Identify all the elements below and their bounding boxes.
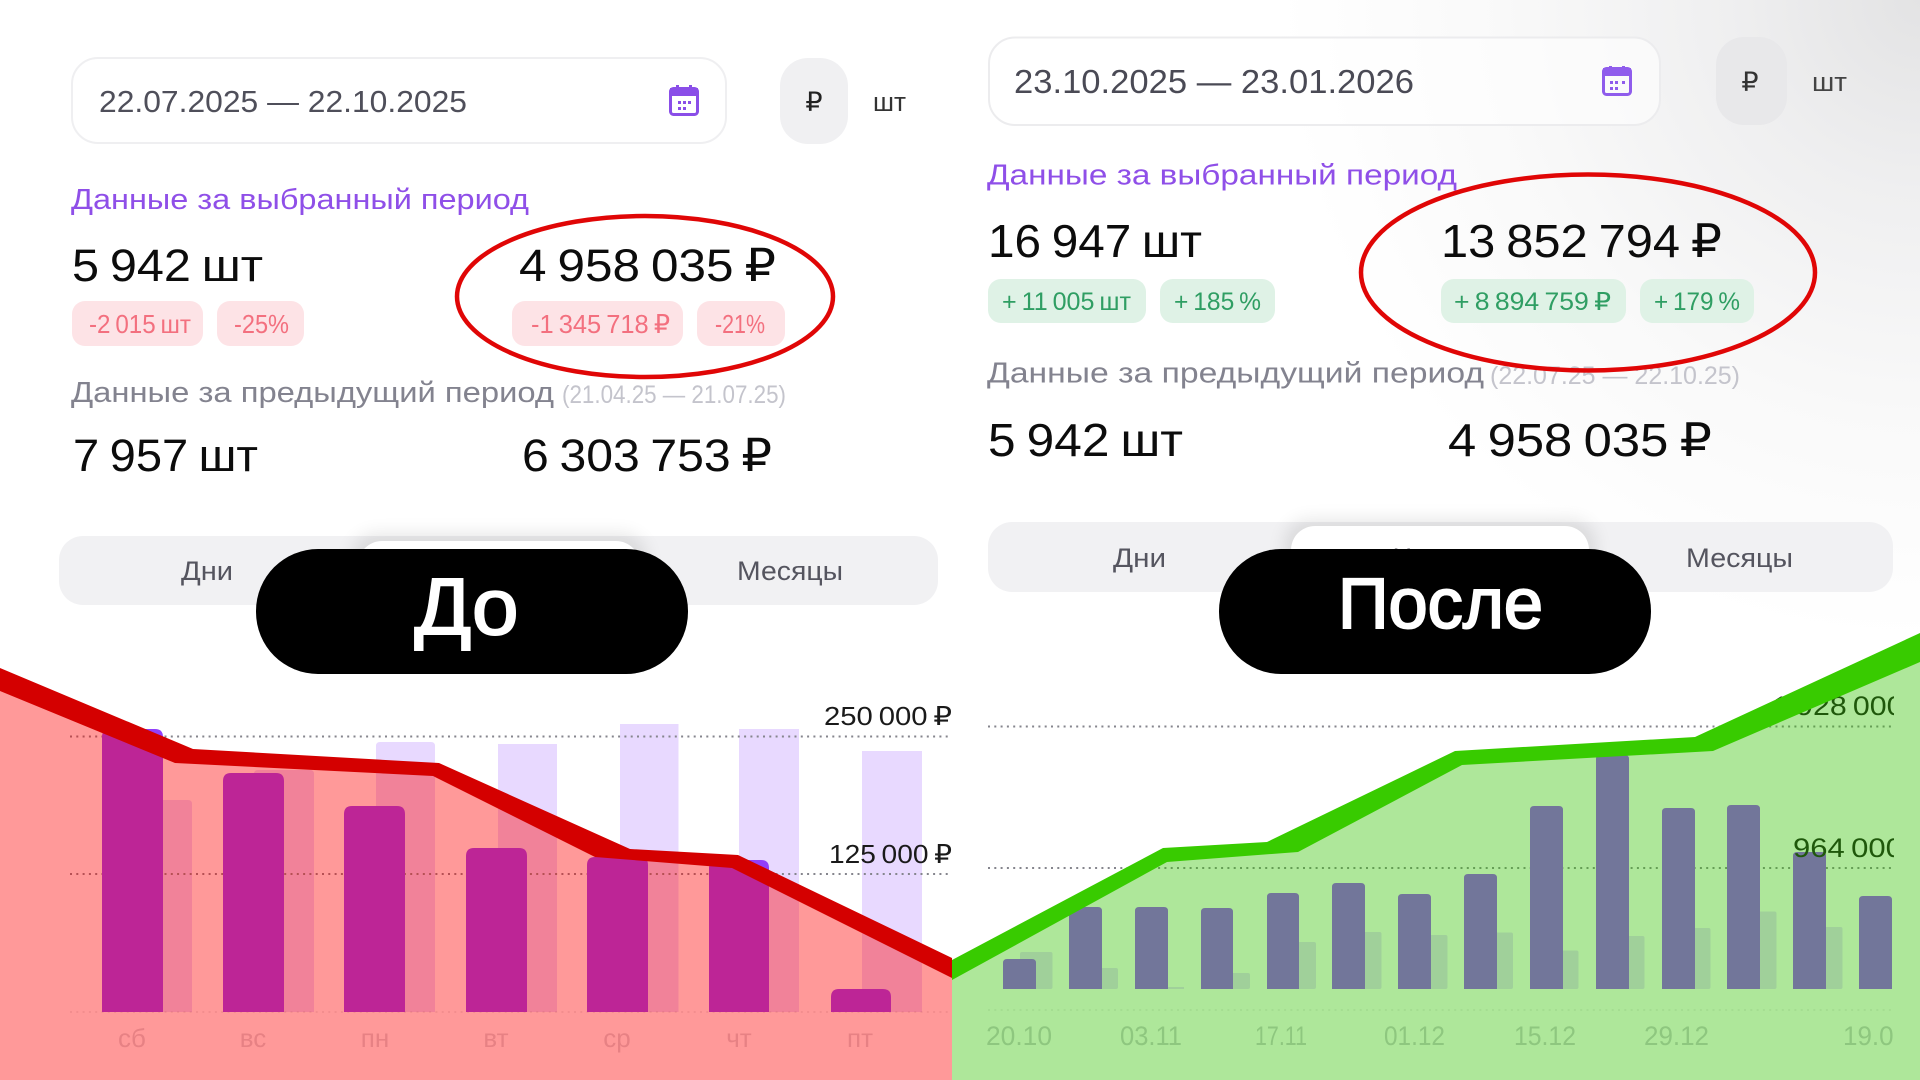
arrow line: growth [952, 633, 1920, 980]
bar chart: before: пн [361, 1023, 389, 1053]
bar chart: before: ср [603, 1023, 631, 1053]
badge: units change: -2 015 шт [89, 309, 191, 339]
date range field: 22.07.2025 — 22.10.2025 [99, 84, 467, 119]
bar chart: after: 964 000 ₽ [1793, 833, 1920, 863]
period tabs: Дни [181, 556, 233, 586]
date range field: 23.10.2025 — 23.01.2026 [1014, 63, 1414, 100]
value: previous revenue: 6 303 753 ₽ [522, 430, 772, 481]
badge: units change [988, 279, 1146, 323]
panel: before [0, 58, 952, 1080]
label: after [1219, 549, 1651, 674]
label: before [256, 549, 688, 674]
bar chart: before: сб [118, 1023, 146, 1053]
badge: revenue percent: + 179 % [1654, 288, 1740, 316]
overlay: red area [0, 680, 952, 1080]
period tabs: Месяцы [737, 556, 843, 586]
heading: previous period [987, 358, 1740, 390]
value: previous units: 5 942 шт [988, 414, 1183, 466]
badge: units change [72, 301, 203, 346]
currency toggle: ₽ [1741, 67, 1759, 97]
bar chart: after: 1 928 000 ₽ [1773, 691, 1920, 721]
value: previous revenue: 4 958 035 ₽ [1448, 414, 1712, 466]
bar chart: after: 03.11 [1120, 1021, 1182, 1051]
period tabs: Дни [1113, 543, 1166, 573]
value: revenue: 13 852 794 ₽ [1441, 215, 1722, 267]
label: before: До [414, 562, 518, 651]
icon: calendar [670, 85, 698, 114]
badge: revenue percent: -21% [715, 309, 765, 339]
bar chart: after: 01.12 [1384, 1021, 1445, 1051]
icon: calendar [1603, 66, 1631, 94]
bar chart: before: вс [240, 1023, 266, 1053]
badge: units percent: + 185 % [1174, 288, 1261, 316]
badge: revenue change [1441, 279, 1626, 323]
bar chart: before: пт [847, 1023, 873, 1053]
value: units: 16 947 шт [988, 215, 1202, 267]
heading: previous period: Данные за предыдущий период [987, 358, 1484, 390]
bar chart: after: 19.01 [1843, 1021, 1908, 1051]
callout: highlighted revenue [457, 216, 833, 377]
badge: units percent [1160, 279, 1275, 323]
period tabs [59, 534, 938, 605]
period tabs: Месяцы [1686, 543, 1793, 573]
heading: selected period: Данные за выбранный период [987, 160, 1457, 192]
period tabs: Недели [1393, 543, 1487, 573]
panel: after [952, 37, 1920, 1080]
currency toggle: шт [873, 87, 906, 117]
overlay: green area [952, 648, 1920, 1080]
badge: units percent: -25% [234, 309, 289, 339]
badge: revenue percent [1640, 279, 1754, 323]
heading: previous period: (22.07.25 — 22.10.25) [1490, 362, 1740, 390]
bar chart: before: 250 000 ₽ [824, 701, 952, 731]
currency toggle [780, 58, 906, 144]
currency toggle [1716, 37, 1847, 125]
bar chart: after [986, 691, 1920, 1051]
heading: selected period: Данные за выбранный период [71, 184, 529, 216]
currency toggle: шт [1812, 67, 1847, 97]
bar chart: before: 125 000 ₽ [829, 839, 952, 869]
value: units: 5 942 шт [72, 240, 263, 291]
badge: revenue change: -1 345 718 ₽ [531, 309, 670, 339]
badge: units percent [217, 301, 304, 346]
date range field [989, 38, 1660, 125]
bar chart: after: 17.11 [1255, 1021, 1307, 1051]
heading: previous period: (21.04.25 — 21.07.25) [562, 381, 786, 409]
bar chart: before: вт [483, 1023, 509, 1053]
period tabs [988, 520, 1893, 592]
badge: revenue change [512, 301, 683, 346]
badge: revenue change: + 8 894 759 ₽ [1454, 288, 1611, 316]
bar chart: after: 29.12 [1644, 1021, 1709, 1051]
bar chart: before: чт [726, 1023, 752, 1053]
label: after: После [1338, 565, 1543, 644]
bar chart: before [70, 701, 952, 1053]
arrow line: decline [0, 668, 952, 978]
currency toggle: ₽ [805, 87, 823, 117]
heading: previous period [71, 377, 786, 409]
badge: revenue percent [697, 301, 785, 346]
callout: highlighted revenue [1361, 174, 1815, 370]
bar chart: after: 15.12 [1514, 1021, 1576, 1051]
value: revenue: 4 958 035 ₽ [519, 240, 776, 291]
value: previous units: 7 957 шт [73, 430, 258, 481]
date range field [72, 58, 726, 143]
heading: previous period: Данные за предыдущий период [71, 377, 554, 409]
bar chart: after: 20.10 [986, 1021, 1052, 1051]
badge: units change: + 11 005 шт [1002, 288, 1132, 316]
